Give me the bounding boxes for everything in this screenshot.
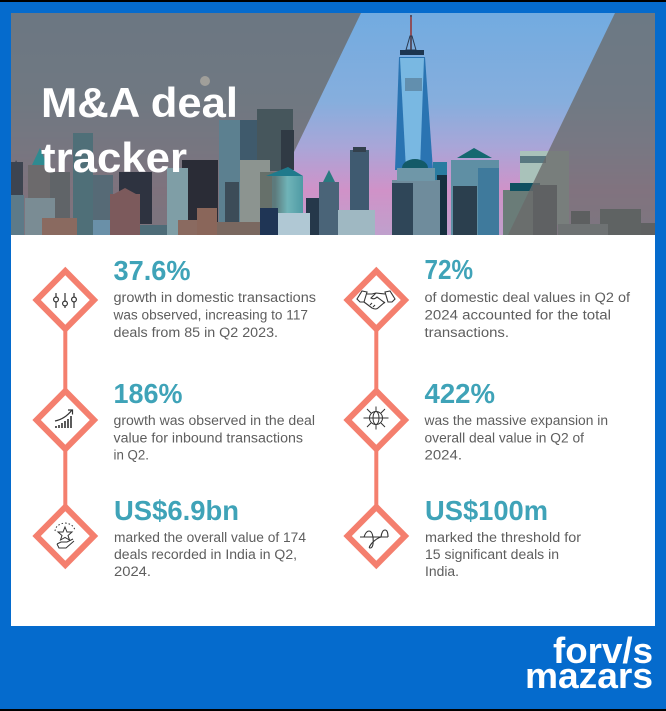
diagonal grey overlays [11,13,655,235]
stat: 422%: 422% [424,378,495,409]
icon: handshake in diamond [348,271,405,329]
title: tracker [41,134,187,181]
stat: 422% [348,378,608,462]
logo: forvis mazars: mazars [525,655,653,696]
stat: US$6.9bn: deals recorded in India in Q2, [114,547,297,562]
stat: 186%: in Q2. [114,448,149,462]
stat: US$100m: US$100m [425,495,548,526]
stat: 186%: 186% [114,378,183,409]
stat: US$100m: 15 significant deals in [425,547,559,562]
icon: sliders in diamond [37,271,94,329]
right timeline connector [374,330,378,506]
stat: 37.6%: growth in domestic transactions [114,290,316,305]
stat: 186%: value for inbound transactions [114,430,303,446]
stat: US$100m [348,495,582,579]
stat: 186% [37,378,315,462]
stat: 37.6% [37,255,316,340]
stat: US$6.9bn: US$6.9bn [114,495,239,526]
logo: forvis mazars: forv/s [553,630,653,671]
stat: US$6.9bn [37,495,306,579]
stat: 72%: of domestic deal values in Q2 of [424,290,630,305]
hero image: city skyline [11,13,655,235]
title: M&A deal [41,79,238,126]
middle-left buildings [167,109,310,235]
stat: 37.6%: was observed, increasing to 117 [112,308,308,322]
stat: 37.6%: deals from 85 in Q2 2023. [114,325,278,340]
icon: star in hand in diamond [37,507,94,565]
stat: 72% [348,254,630,340]
stat: 72%: transactions. [424,325,509,340]
icon: growth chart in diamond [37,391,94,449]
stat: 422%: was the massive expansion in [423,413,608,428]
stat: US$6.9bn: marked the overall value of 174 [114,530,306,545]
stat: 422%: 2024. [424,448,462,462]
stat: US$6.9bn: 2024. [114,564,151,579]
stat: 72%: 2024 accounted for the total [424,308,611,322]
stat: 186%: growth was observed in the deal [114,413,315,428]
white content panel [11,235,655,626]
logo: forvis mazars [525,630,653,696]
icon: wave line in diamond [348,507,405,565]
one world trade tower [395,15,433,170]
stat: US$100m: marked the threshold for [425,530,582,545]
title [41,79,238,181]
centre buildings [306,147,375,235]
right-hand buildings [392,148,655,235]
stat: 422%: overall deal value in Q2 of [424,430,584,446]
stat: US$100m: India. [425,564,459,579]
left skyline buildings [11,133,167,235]
icon: network globe in diamond [348,391,405,449]
stat: 37.6%: 37.6% [114,255,191,286]
stat: 72%: 72% [424,254,473,285]
left timeline connector [63,330,67,506]
moon [200,76,210,86]
